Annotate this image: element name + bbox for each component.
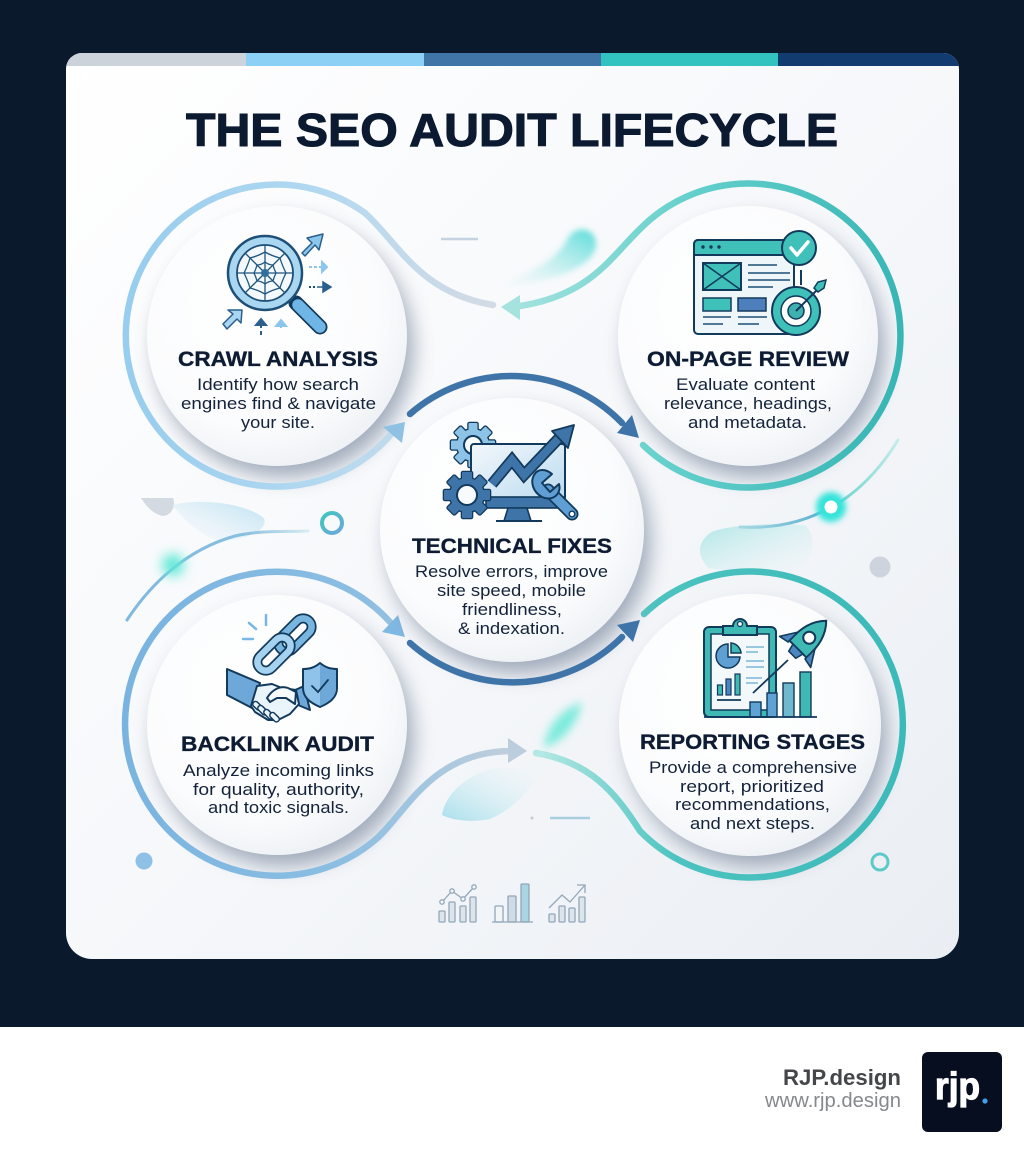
description: crawl analysis: your site. [241, 414, 315, 432]
icon: clipboard, bars and rocket [704, 605, 842, 717]
disc shadows [155, 219, 886, 866]
flow arc: technical fixes top [410, 376, 639, 438]
heading: on-page review: ON-PAGE REVIEW [647, 348, 849, 371]
footer brand text: www.rjp.design [764, 1090, 901, 1112]
icon: small charts row [439, 884, 585, 922]
description: crawl analysis [181, 376, 376, 432]
description: backlink audit: Analyze incoming links [183, 762, 374, 780]
panel: on-page review [618, 206, 878, 466]
flow ring: on-page review [501, 184, 900, 488]
description: on-page review: relevance, headings, [664, 395, 832, 413]
description: technical fixes: & indexation. [458, 620, 565, 638]
panel: reporting stages [619, 594, 881, 856]
title: THE SEO AUDIT LIFECYCLE [186, 104, 838, 156]
description: reporting stages: Provide a comprehensive [649, 759, 857, 777]
description: technical fixes: site speed, mobile [437, 582, 586, 600]
flow ring: reporting stages [536, 571, 903, 877]
heading: backlink audit: BACKLINK AUDIT [181, 733, 374, 756]
description: reporting stages [649, 759, 857, 833]
panel: technical fixes [380, 398, 644, 662]
description: reporting stages: report, prioritized [680, 778, 824, 796]
icon: chain, handshake and shield [227, 615, 337, 723]
footer logo: rjp [935, 1066, 980, 1108]
icon: magnifier with web [223, 234, 331, 335]
icon: web page with target [694, 231, 826, 335]
description: on-page review [664, 376, 832, 432]
panel: crawl analysis [147, 206, 407, 466]
card panel [66, 53, 959, 959]
decorative blobs and accents [127, 229, 898, 870]
heading: crawl analysis: CRAWL ANALYSIS [178, 348, 378, 371]
flow ring: backlink audit [125, 572, 527, 876]
description: backlink audit: for quality, authority, [193, 781, 364, 799]
description: on-page review: Evaluate content [676, 376, 815, 394]
description: reporting stages: recommendations, [675, 796, 830, 814]
flow ring: crawl analysis [126, 185, 493, 487]
footer brand text: RJP.design [783, 1065, 901, 1090]
description: on-page review: and metadata. [688, 414, 807, 432]
description: technical fixes: Resolve errors, improve [415, 563, 608, 581]
heading: reporting stages: REPORTING STAGES [640, 731, 865, 754]
footer band [0, 1027, 1024, 1154]
panel: backlink audit [147, 595, 407, 855]
footer brand text [764, 1065, 901, 1112]
description: technical fixes [415, 563, 608, 638]
description: backlink audit: and toxic signals. [208, 799, 349, 817]
description: crawl analysis: Identify how search [197, 376, 359, 394]
icon: monitor, gears, trend arrow and wrench [444, 423, 575, 521]
flow arc: technical fixes bottom [410, 620, 640, 682]
footer logo [922, 1052, 1002, 1132]
description: reporting stages: and next steps. [690, 815, 815, 833]
central disc shadow [388, 411, 650, 673]
heading: technical fixes: TECHNICAL FIXES [412, 535, 612, 558]
description: backlink audit [183, 762, 374, 817]
description: crawl analysis: engines find & navigate [181, 395, 376, 413]
description: technical fixes: friendliness, [462, 601, 562, 619]
